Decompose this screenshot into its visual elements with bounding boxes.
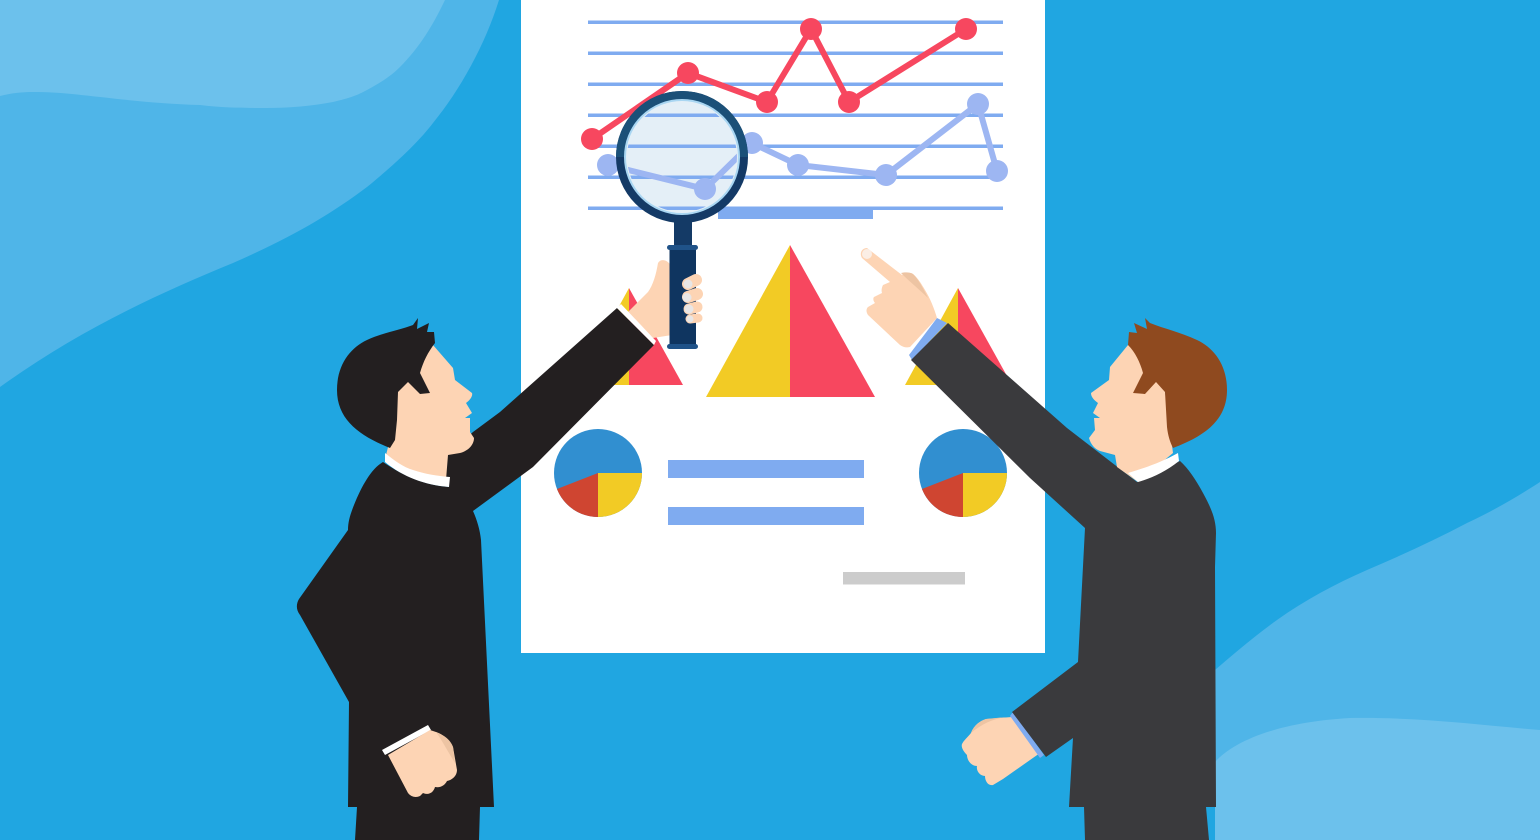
lower cuff <box>382 725 431 755</box>
lens ring highlight <box>616 91 748 157</box>
blue sleeve cuff <box>909 318 947 360</box>
background wave: bottom-right light tone <box>1215 718 1540 840</box>
lower fist shade <box>971 717 1006 733</box>
triangle chart: left <box>576 288 683 385</box>
raised hand fingers <box>688 280 698 319</box>
background wave: top-left light tone <box>0 0 445 108</box>
shirt collar <box>1128 453 1179 482</box>
hair <box>337 318 435 448</box>
lower fist <box>388 730 457 797</box>
text placeholder bar: upper <box>668 460 864 478</box>
handle top cap <box>667 245 698 250</box>
finger nails <box>682 280 694 322</box>
handle bottom cap <box>667 344 698 349</box>
lower fist <box>962 717 1040 785</box>
lens ring <box>616 91 748 223</box>
pie chart: right <box>919 429 1007 517</box>
signature placeholder bar <box>843 572 965 584</box>
handle grip <box>670 248 696 347</box>
magnified chart <box>628 114 737 210</box>
handle neck <box>674 220 692 250</box>
hair <box>1128 318 1227 448</box>
white sleeve cuff <box>617 304 656 345</box>
lens glass <box>625 100 739 214</box>
right man pointing <box>861 248 1227 840</box>
chart caption bar <box>718 208 873 219</box>
pointing hand <box>861 248 937 347</box>
triangle chart: centre <box>706 245 875 397</box>
finger nail <box>862 249 872 259</box>
text placeholder bar: lower <box>668 507 864 525</box>
grey suit <box>911 323 1216 840</box>
face and neck <box>386 345 474 480</box>
blue data series <box>597 93 1008 189</box>
face and neck <box>1089 345 1173 482</box>
left man with magnifier <box>297 91 752 840</box>
fist thumb shade <box>436 732 455 763</box>
blue lower cuff <box>1010 712 1044 758</box>
magnifying glass <box>608 91 752 349</box>
line chart <box>581 18 1008 219</box>
triangle chart: right <box>905 288 1012 385</box>
background wave: top-left mid tone <box>0 0 499 387</box>
chart grid lines <box>588 20 1003 210</box>
background wave: bottom-right mid tone <box>1215 482 1540 840</box>
red data series <box>581 18 977 150</box>
pie chart: left <box>554 429 642 517</box>
shirt collar <box>385 453 450 487</box>
black suit <box>297 308 654 840</box>
pointing hand shade <box>901 272 928 298</box>
document panel <box>521 0 1045 653</box>
raised hand thumb and palm <box>628 260 672 338</box>
